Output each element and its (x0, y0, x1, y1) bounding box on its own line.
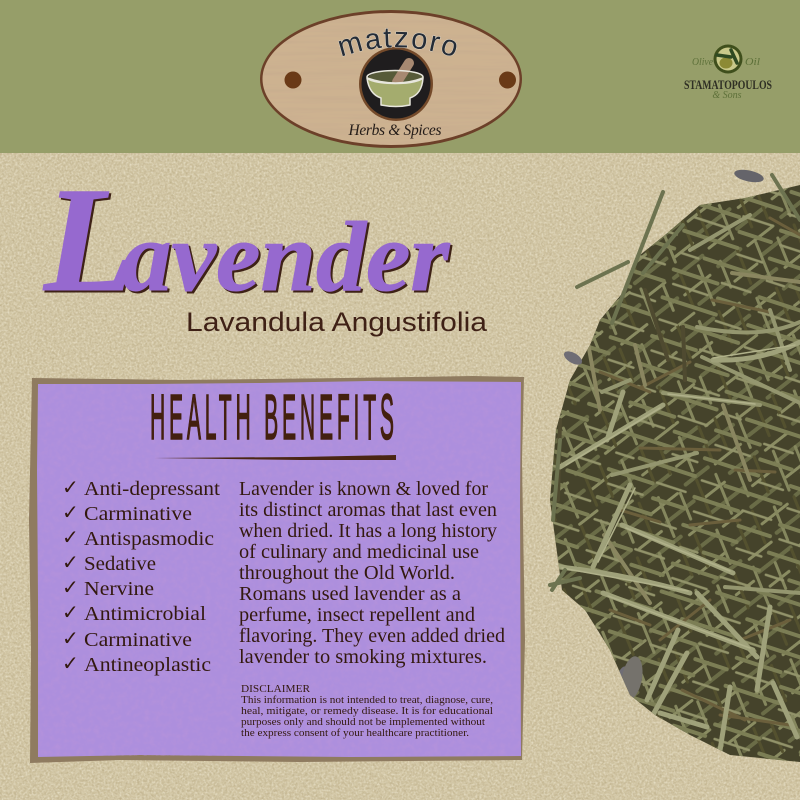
benefits checklist: Antineoplastic (84, 654, 211, 676)
subtitle: botanical name: Lavandula Angustifolia (186, 307, 488, 337)
logo word: matzoro: matzoro (338, 28, 457, 56)
disclaimer: heal, mitigate, or remedy disease. It is for educational (241, 705, 493, 717)
title: Lavender: Lavender (42, 157, 450, 323)
panel frame (29, 376, 525, 763)
benefits checklist: Sedative (84, 553, 156, 575)
header band (0, 0, 800, 153)
benefits checklist: Anti-depressant (84, 478, 220, 500)
logo: Stamatopoulos and Sons olive oil (684, 44, 772, 101)
illustration: pile of dried lavender needles (540, 168, 800, 770)
description paragraph: perfume, insect repellent and (239, 605, 475, 626)
description paragraph: of culinary and medicinal use (239, 542, 479, 563)
heading underline (154, 455, 396, 460)
benefits checklist: Antimicrobial (84, 603, 206, 625)
benefits checklist: ✓ (62, 500, 79, 524)
logo tagline: Herbs & Spices (348, 122, 442, 139)
lavender bud on paper (733, 168, 765, 184)
benefits checklist: ✓ (62, 651, 79, 675)
disclaimer: This information is not intended to treat, diagnose, cure, (241, 694, 493, 706)
lavender buds in pile (620, 656, 642, 698)
wood plaque holes (284, 72, 516, 88)
description paragraph: Romans used lavender as a (239, 584, 461, 605)
heading: health benefits: HEALTH BENEFITS (150, 383, 398, 454)
description paragraph (239, 479, 505, 668)
logo text: olive oil: Oil (745, 56, 760, 68)
description paragraph: flavoring. They even added dried (239, 626, 505, 647)
disclaimer: DISCLAIMER (241, 683, 311, 695)
panel purple paper (37, 381, 521, 757)
benefits checklist: ✓ (62, 575, 79, 599)
description paragraph: when dried. It has a long history (239, 521, 497, 542)
panel: health benefits (29, 376, 525, 763)
benefits checklist: ✓ (62, 550, 79, 574)
needles: textured layers (540, 170, 800, 770)
disclaimer (241, 683, 493, 739)
benefits checklist: ✓ (62, 525, 79, 549)
logo text: olive oil: Olive (692, 56, 713, 68)
benefits checklist: Antispasmodic (84, 528, 214, 550)
logo text: olive oil (692, 56, 760, 68)
logo text: and Sons: & Sons (712, 90, 742, 101)
disclaimer: purposes only and should not be implemented without (241, 716, 485, 728)
needles: large foreground (558, 290, 685, 500)
description paragraph: Lavender is known & loved for (239, 479, 489, 500)
lavender bud at pile edge (562, 349, 584, 367)
benefits checklist: Carminative (84, 503, 192, 525)
benefits checklist: ✓ (62, 475, 79, 499)
benefits checklist: ✓ (62, 600, 79, 624)
stray needles (550, 175, 800, 590)
benefits checklist: Carminative (84, 629, 192, 651)
logo text: Stamatopoulos: STAMATOPOULOS (684, 78, 772, 92)
description paragraph: lavender to smoking mixtures. (239, 647, 487, 668)
benefits checklist (62, 475, 220, 676)
description paragraph: its distinct aromas that last even (239, 500, 497, 521)
benefits checklist: Nervine (84, 578, 154, 600)
disclaimer: the express consent of your healthcare practitioner. (241, 727, 469, 739)
icon: mortar and pestle (359, 47, 433, 121)
pile base (550, 185, 800, 762)
benefits checklist: ✓ (62, 626, 79, 650)
logo: matzoro wooden plaque (260, 10, 522, 148)
description paragraph: throughout the Old World. (239, 563, 455, 584)
icon: olive badge (714, 44, 742, 74)
